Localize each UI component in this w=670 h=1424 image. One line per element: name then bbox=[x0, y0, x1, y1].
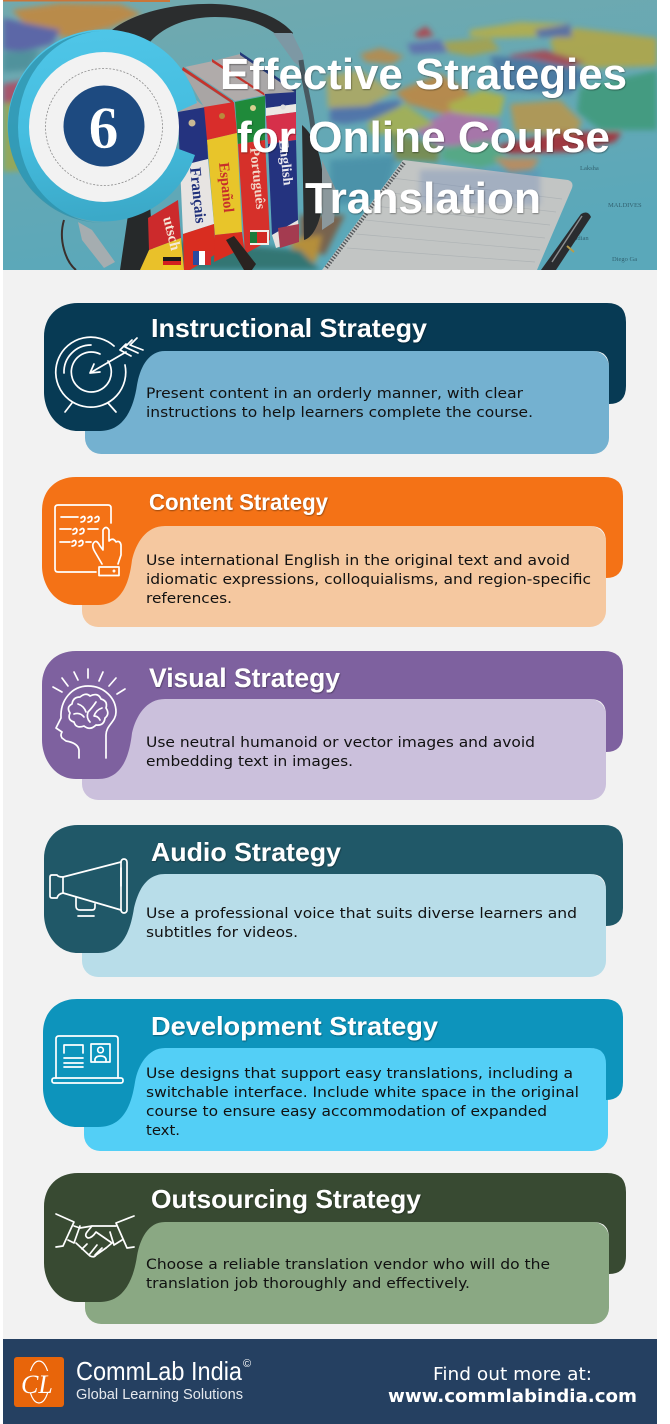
book: Español bbox=[204, 102, 244, 262]
panel: Outsourcing Strategy bbox=[44, 1173, 626, 1324]
panel: Development Strategy bbox=[43, 999, 623, 1151]
description bbox=[146, 553, 591, 607]
heading: Outsourcing Strategy bbox=[151, 1184, 422, 1214]
copyright mark: © bbox=[243, 1358, 251, 1370]
map labels: Laksha bbox=[580, 165, 599, 172]
panel: Visual Strategy bbox=[42, 651, 623, 800]
description: Use neutral humanoid or vector images and avoid bbox=[146, 735, 535, 751]
description bbox=[146, 386, 533, 421]
description: translation job thoroughly and effectively. bbox=[146, 1276, 470, 1292]
icon: handshake bbox=[56, 1214, 134, 1257]
title: for Online Course bbox=[237, 113, 610, 162]
description: course to ensure easy accommodation of expanded bbox=[146, 1104, 547, 1120]
map labels: Diego Ga bbox=[612, 256, 637, 263]
books bbox=[140, 52, 299, 270]
description: references. bbox=[146, 591, 232, 607]
map background bbox=[3, 0, 657, 270]
book: Deutsch: utsch bbox=[159, 215, 183, 253]
book: Português bbox=[235, 96, 270, 254]
book: Español: Español bbox=[215, 162, 236, 213]
description: instructions to help learners complete the course. bbox=[146, 405, 533, 421]
icon: target with arrow bbox=[56, 337, 143, 412]
panel: Instructional Strategy bbox=[44, 303, 626, 454]
book: Français bbox=[178, 107, 216, 270]
heading: Instructional Strategy bbox=[151, 313, 428, 343]
map labels: Indian bbox=[572, 235, 589, 242]
book: Português: Português bbox=[246, 147, 267, 211]
description: subtitles for videos. bbox=[146, 925, 298, 941]
book: English bbox=[265, 92, 299, 248]
circular badge with number 6 bbox=[8, 29, 197, 223]
map labels: MALDIVES bbox=[608, 202, 642, 209]
title: Effective Strategies bbox=[220, 50, 627, 99]
pen bbox=[541, 213, 591, 270]
description: switchable interface. Include white space in the original bbox=[146, 1085, 579, 1101]
map labels bbox=[572, 165, 642, 263]
description: embedding text in images. bbox=[146, 754, 353, 770]
heading: Development Strategy bbox=[151, 1011, 439, 1041]
headphones bbox=[62, 4, 336, 270]
number: 6 bbox=[88, 95, 118, 161]
description: Present content in an orderly manner, with clear bbox=[146, 386, 523, 402]
description bbox=[146, 735, 535, 770]
find out more: Find out more at: bbox=[433, 1364, 592, 1385]
headphone jack plug bbox=[226, 236, 256, 270]
logo: CL bbox=[21, 1370, 53, 1399]
description: text. bbox=[146, 1123, 180, 1139]
description: idiomatic expressions, colloquialisms, and region-specific bbox=[146, 572, 591, 588]
white ring bbox=[29, 52, 179, 202]
description bbox=[146, 906, 577, 941]
title bbox=[220, 50, 627, 223]
icon: checklist with pointing hand bbox=[55, 505, 121, 576]
outer blue ring bbox=[8, 29, 197, 221]
footer bar bbox=[3, 1339, 657, 1424]
title: Translation bbox=[305, 174, 541, 223]
description bbox=[146, 1257, 550, 1292]
website: www.commlabindia.com bbox=[388, 1386, 637, 1407]
description: Use designs that support easy translations, including a bbox=[146, 1066, 573, 1082]
panel: Content Strategy bbox=[42, 477, 623, 627]
panel: Audio Strategy bbox=[44, 825, 623, 977]
hero banner bbox=[3, 0, 657, 270]
map top strip bbox=[3, 0, 170, 2]
description bbox=[146, 1066, 579, 1139]
logo bbox=[14, 1357, 64, 1407]
icon: megaphone bbox=[50, 859, 127, 916]
company name: CommLab India bbox=[76, 1356, 242, 1386]
icon: laptop with profile bbox=[52, 1036, 123, 1083]
heading: Audio Strategy bbox=[151, 837, 342, 867]
heading: Visual Strategy bbox=[149, 663, 340, 693]
book: English: English bbox=[275, 139, 295, 186]
book: Français: Français bbox=[186, 167, 209, 224]
dashed circle bbox=[46, 68, 162, 186]
notebook bbox=[322, 160, 572, 270]
navy centre bbox=[64, 86, 144, 166]
description: Use a professional voice that suits diverse learners and bbox=[146, 906, 577, 922]
page blocks of books bbox=[213, 54, 295, 96]
description: Use international English in the original text and avoid bbox=[146, 553, 570, 569]
heading: Content Strategy bbox=[149, 489, 328, 515]
description: Choose a reliable translation vendor who will do the bbox=[146, 1257, 550, 1273]
book: Deutsch bbox=[140, 200, 184, 270]
icon: head with brain bbox=[53, 669, 125, 758]
tagline: Global Learning Solutions bbox=[76, 1386, 243, 1403]
